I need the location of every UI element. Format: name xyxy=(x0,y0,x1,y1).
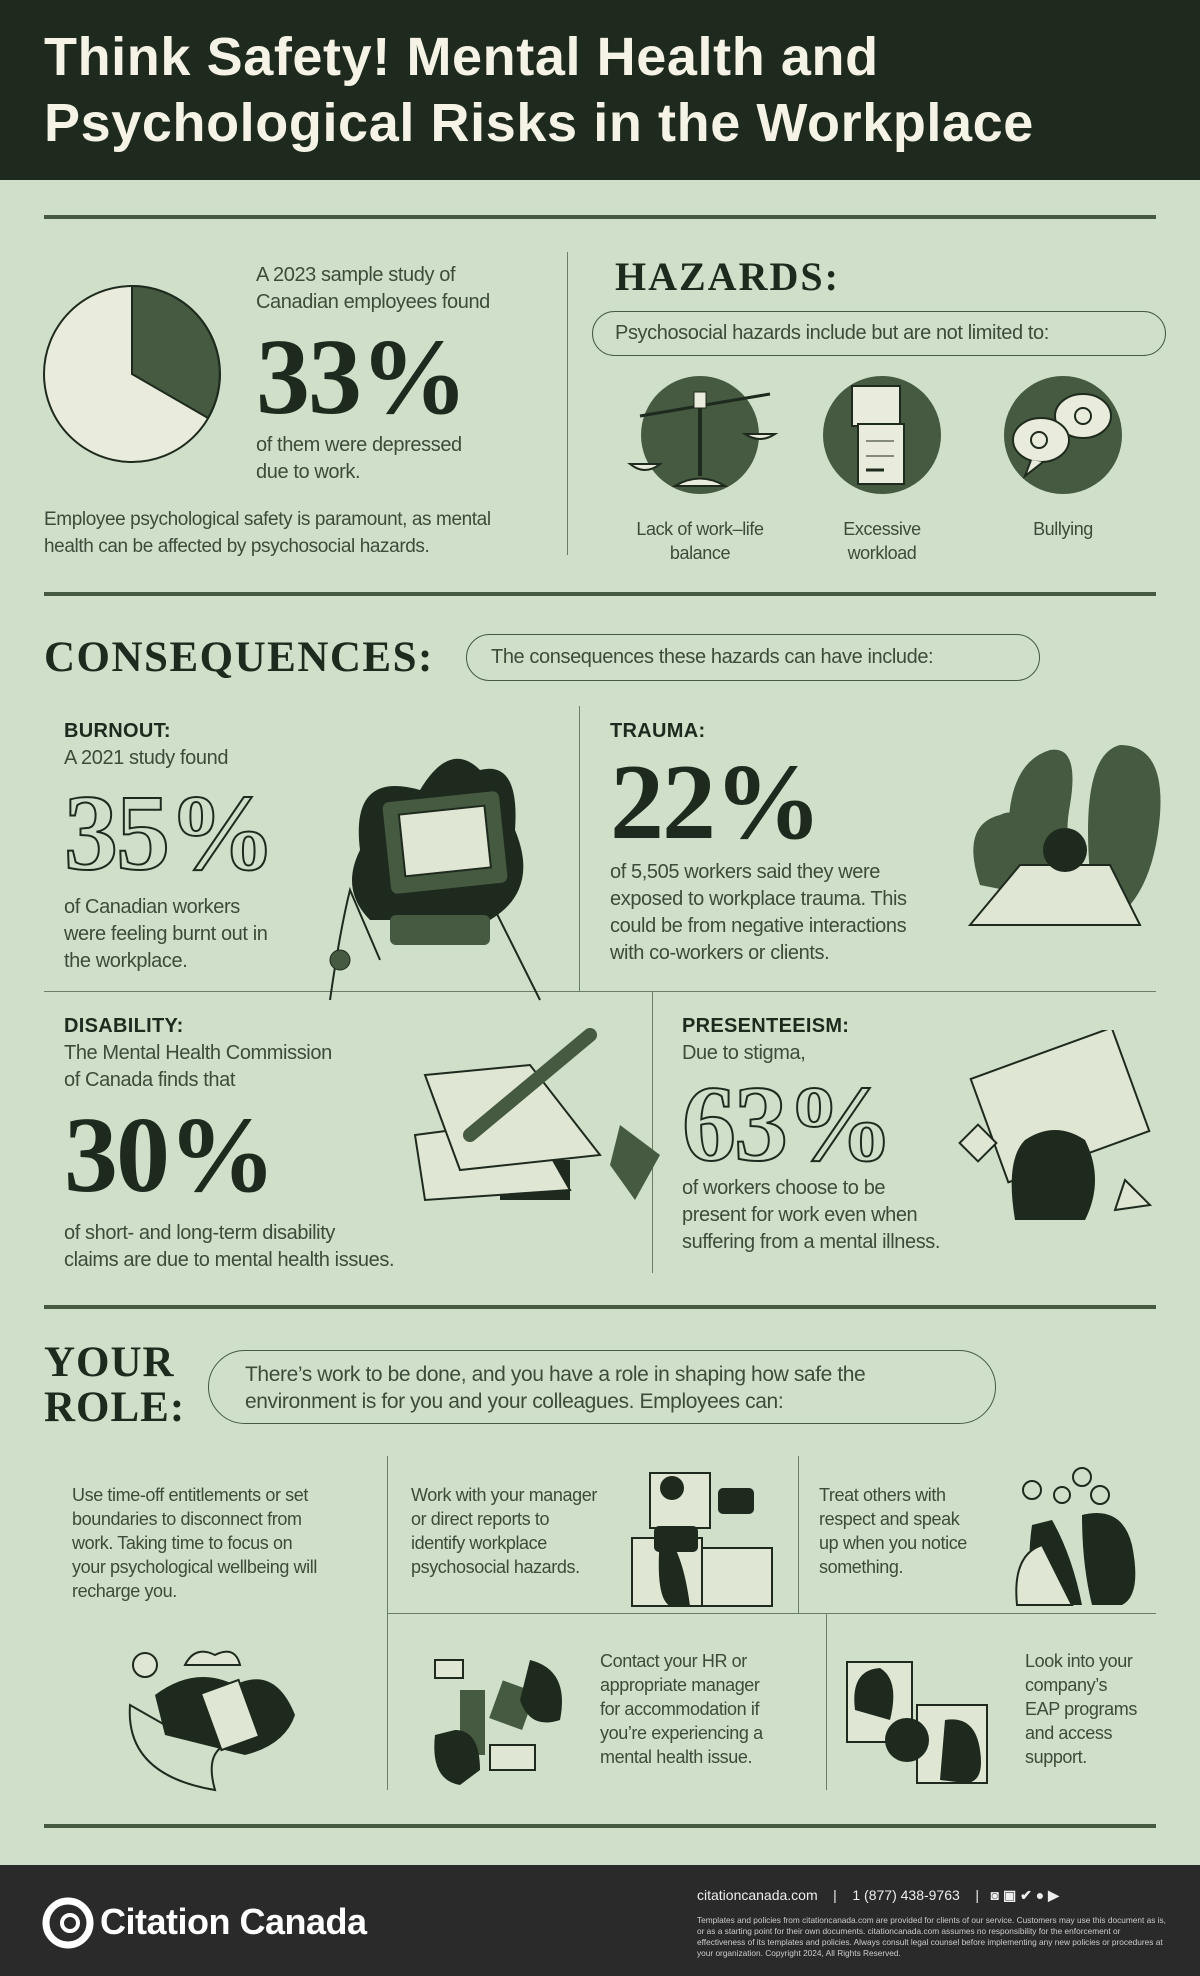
panel: disability: of Canada finds that xyxy=(64,1069,235,1091)
role: EAP: company’s xyxy=(1025,1675,1107,1695)
role: time off: recharge you. xyxy=(72,1581,177,1601)
illustration: relaxing person xyxy=(128,1650,295,1792)
role: time off: your psychological wellbeing will xyxy=(72,1557,317,1577)
consequences pill xyxy=(466,634,1040,681)
panel: burnout: were feeling burnt out in xyxy=(64,923,267,945)
stat 33% text xyxy=(256,264,490,483)
role: treat others: respect and speak xyxy=(819,1509,959,1529)
panel: burnout: A 2021 study found xyxy=(64,747,228,769)
hazards heading: HAZARDS: xyxy=(615,254,840,299)
panel: burnout: of Canadian workers xyxy=(64,896,240,918)
role: work with manager: identify workplace xyxy=(411,1533,547,1553)
icon: scales xyxy=(627,376,778,563)
title xyxy=(44,27,1034,153)
panel: presenteeism: PRESENTEEISM: xyxy=(682,1015,849,1037)
role: treat others: something. xyxy=(819,1557,903,1577)
role: treat others xyxy=(819,1485,967,1577)
illustration: planning xyxy=(434,1659,562,1785)
role: contact HR: mental health issue. xyxy=(600,1747,752,1767)
pie chart 33% xyxy=(43,285,221,463)
stat 33% text: of them were depressed xyxy=(256,434,462,456)
logo: Citation Canada xyxy=(100,1901,367,1942)
consequences heading: CONSEQUENCES: xyxy=(44,634,434,681)
icon: workload: Excessive xyxy=(843,519,921,539)
intro text: Employee psychological safety is paramount, as mental xyxy=(44,509,491,530)
role: contact HR xyxy=(600,1651,764,1767)
panel: burnout: BURNOUT: xyxy=(64,720,171,742)
role: EAP: and access xyxy=(1025,1723,1112,1743)
role pill: environment is for you and your colleagues. Employees can: xyxy=(245,1390,783,1413)
logo xyxy=(42,1898,368,1948)
panel: presenteeism: present for work even when xyxy=(682,1204,917,1226)
illustration: writing on paper xyxy=(414,1028,660,1201)
role: time off: work. Taking time to focus on xyxy=(72,1533,292,1553)
role: work with manager: psychosocial hazards. xyxy=(411,1557,580,1577)
panel: presenteeism xyxy=(682,1015,940,1253)
illustration: video call xyxy=(631,1472,773,1607)
hazards pill xyxy=(592,311,1166,356)
icon: workload xyxy=(823,376,941,563)
your role heading xyxy=(44,1339,185,1431)
intro text: health can be affected by psychosocial hazards. xyxy=(44,536,429,557)
stat 33% text: due to work. xyxy=(256,461,360,483)
panel: trauma: exposed to workplace trauma. This xyxy=(610,888,907,910)
role pill: There’s work to be done, and you have a role in shaping how safe the xyxy=(245,1363,865,1386)
panel: disability: of short- and long-term disability xyxy=(64,1222,335,1244)
role: work with manager xyxy=(411,1485,598,1577)
role pill xyxy=(208,1350,996,1424)
role: contact HR: Contact your HR or xyxy=(600,1651,747,1671)
panel: presenteeism: suffering from a mental illness. xyxy=(682,1231,940,1253)
panel: disability: The Mental Health Commission xyxy=(64,1042,332,1064)
title: Think Safety! Mental Health and xyxy=(44,27,879,87)
role: EAP: Look into your xyxy=(1025,1651,1132,1671)
icon: workload: workload xyxy=(848,543,916,563)
icon: bullying xyxy=(1004,376,1122,539)
role: treat others: Treat others with xyxy=(819,1485,946,1505)
panel: presenteeism: Due to stigma, xyxy=(682,1042,805,1064)
hazards pill: Psychosocial hazards include but are not limited to: xyxy=(615,322,1049,344)
role: EAP xyxy=(1025,1651,1137,1767)
icon: scales: Lack of work–life xyxy=(636,519,764,539)
role: contact HR: you’re experiencing a xyxy=(600,1723,763,1743)
header banner xyxy=(0,0,1200,180)
role: contact HR: appropriate manager xyxy=(600,1675,760,1695)
panel: disability: DISABILITY: xyxy=(64,1015,184,1037)
illustration: video chat xyxy=(846,1661,988,1784)
role: contact HR: for accommodation if xyxy=(600,1699,759,1719)
panel: trauma: of 5,505 workers said they were xyxy=(610,861,880,883)
role: treat others: up when you notice xyxy=(819,1533,967,1553)
stat 33% text: A 2023 sample study of xyxy=(256,264,455,286)
panel: trauma: could be from negative interactions xyxy=(610,915,906,937)
role: EAP: EAP programs xyxy=(1025,1699,1137,1719)
footer xyxy=(0,1865,1200,1976)
panel: presenteeism: of workers choose to be xyxy=(682,1177,885,1199)
panel: burnout xyxy=(64,720,267,972)
panel: disability xyxy=(64,1015,394,1271)
title: Psychological Risks in the Workplace xyxy=(44,93,1034,153)
icon: bullying: Bullying xyxy=(1033,519,1093,539)
consequences pill: The consequences these hazards can have include: xyxy=(491,646,933,668)
role: EAP: support. xyxy=(1025,1747,1087,1767)
role: time off xyxy=(72,1485,317,1601)
your role heading: YOUR xyxy=(44,1339,175,1386)
role: work with manager: or direct reports to xyxy=(411,1509,549,1529)
illustration: two people talking xyxy=(1015,1467,1136,1606)
panel: trauma: TRAUMA: xyxy=(610,720,705,742)
panel: burnout: the workplace. xyxy=(64,950,187,972)
panel: trauma xyxy=(610,720,907,964)
panel: disability: claims are due to mental health issues. xyxy=(64,1249,394,1271)
role: time off: boundaries to disconnect from xyxy=(72,1509,302,1529)
disclaimer: Templates and policies from citationcanada.com are provided for clients of our service. Customers may use this document as is, or as a starting point for their own documents. citationcanada.com assumes no responsibility for the enforcement or effectiveness of its templates and policies. Always consult legal counsel before implementing any new policies or procedures at your organization. Copyright 2024, All Rights Reserved. xyxy=(697,1915,1166,1958)
your role heading: ROLE: xyxy=(44,1384,185,1431)
role: time off: Use time-off entitlements or set xyxy=(72,1485,308,1505)
illustration: burning computer xyxy=(329,758,541,1000)
contact info: citationcanada.com | 1 (877) 438-9763 | ◙ ▣ ✔ ● ▶ xyxy=(697,1887,1059,1903)
illustration: shadows and stressed person xyxy=(968,745,1160,926)
illustration: calendar and worried person xyxy=(958,1030,1152,1220)
stat 33% text: 33% xyxy=(256,318,466,437)
panel: trauma: with co-workers or clients. xyxy=(610,942,829,964)
intro text xyxy=(44,509,491,557)
role: work with manager: Work with your manager xyxy=(411,1485,597,1505)
panel: disability: 30% xyxy=(64,1096,274,1215)
icon: scales: balance xyxy=(670,543,730,563)
panel: trauma: 22% xyxy=(610,743,820,862)
stat 33% text: Canadian employees found xyxy=(256,291,490,313)
